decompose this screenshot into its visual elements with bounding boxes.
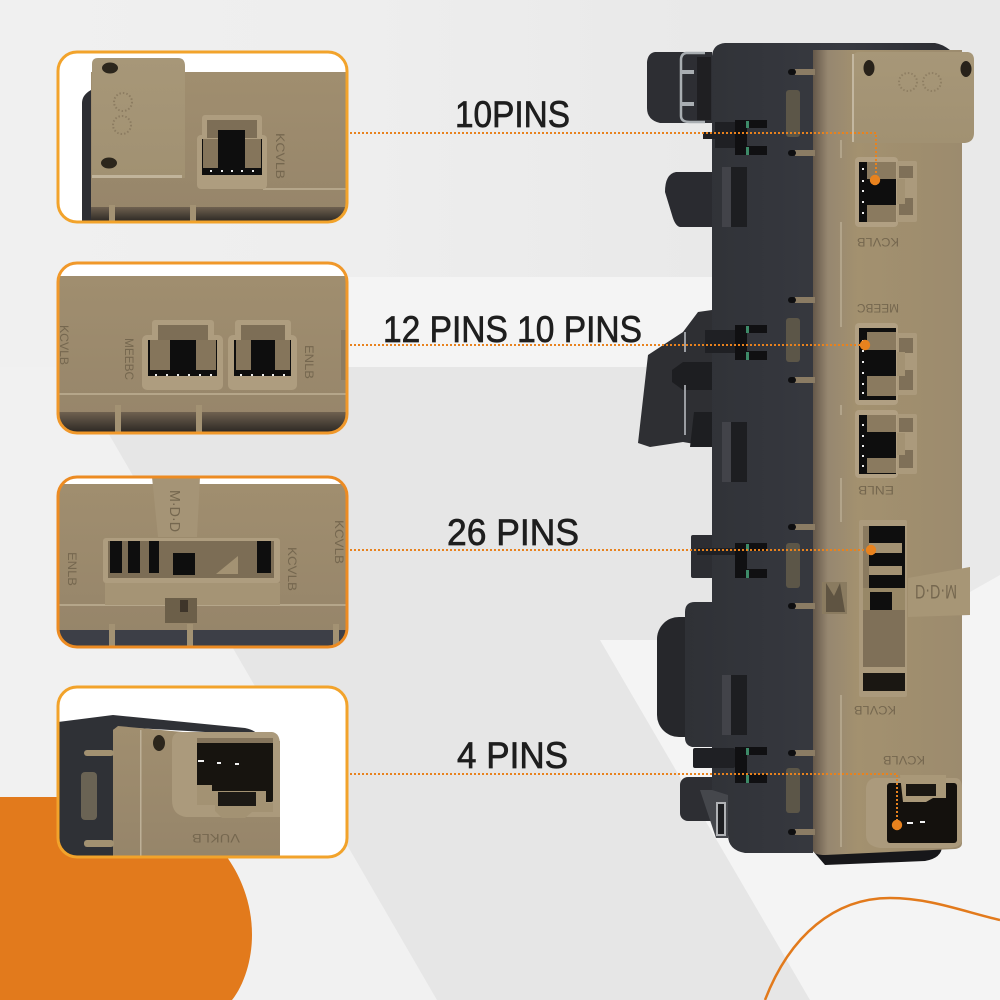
panel 2 frame (58, 263, 347, 433)
bottom clip (680, 777, 730, 838)
moulded blocks (722, 167, 747, 735)
raised light lines (840, 140, 842, 847)
tan body (84, 726, 280, 857)
black base under tan (813, 846, 942, 865)
lower bump (105, 583, 280, 605)
embossed label right: KCVLB (332, 520, 346, 564)
embossed label: 12 pins: MEEBC (857, 301, 899, 315)
panel 4 frame (58, 687, 347, 857)
tan body (58, 276, 347, 433)
26-pin slot (103, 538, 280, 583)
DDM tab with label (152, 477, 200, 537)
far-left label: KCVLB (57, 325, 71, 365)
label: 26 PINS: 26 PINS (447, 512, 579, 553)
latch inner (672, 362, 712, 447)
housing ridge (341, 330, 346, 380)
rounded windows (786, 90, 800, 813)
black housing edge (82, 90, 91, 222)
tan ribs through black (795, 69, 815, 835)
side protrusions (693, 122, 735, 768)
panel 3 frame (58, 477, 347, 647)
rocker knob (657, 617, 707, 737)
side tab lower (691, 535, 715, 578)
panel: 12 and 10 pins close-up (57, 263, 347, 433)
connector: 10 pins lower (855, 410, 917, 478)
black body (685, 43, 950, 853)
edge label: MEEBC (348, 133, 362, 179)
embossed label: lower 10 pins: ENLB (858, 483, 894, 497)
black housing (58, 715, 258, 857)
leader: 4 PINS (350, 774, 902, 830)
label: 10PINS: 10PINS (455, 94, 570, 135)
orange curved line bottom-right (765, 898, 1000, 1000)
leader: 12 PINS 10 PINS (350, 340, 870, 350)
side tab upper (665, 172, 712, 227)
leader: 10PINS (350, 133, 880, 185)
panel: 4 pins close-up (58, 687, 347, 857)
tan body (91, 72, 347, 222)
DDM tab with label: D·D·M (915, 580, 957, 601)
panel 1 frame (58, 52, 347, 222)
product: switch housing (638, 43, 974, 865)
connector: 12 pins (855, 323, 917, 405)
embossed label: VUKLB (192, 831, 240, 845)
connector: 10 pins (228, 320, 297, 390)
DDM tab with label: M·D·D (166, 490, 183, 532)
panel: 10 pins close-up (58, 52, 362, 222)
tan body (58, 484, 347, 647)
embossed label: 4 pins: KCVLB (883, 753, 925, 767)
connector: 10 pins upper (855, 157, 917, 227)
embossed label left: ENLB (65, 552, 79, 586)
orange blob bottom-left (0, 797, 252, 1000)
embossed label: upper 10 pins: KCVLB (857, 235, 899, 249)
latch highlight (684, 332, 686, 435)
notch (165, 598, 197, 623)
green-lit notches (735, 120, 767, 783)
embossed label: 26 pins: KCVLB (854, 703, 896, 717)
tan body (813, 50, 962, 855)
connector: 26 pins slot (859, 520, 907, 697)
mounting tab (92, 58, 185, 178)
panel: 26 pins close-up (58, 477, 347, 647)
left clip top (647, 52, 712, 123)
DDM tab with label (908, 567, 970, 617)
leader: 26 PINS (350, 545, 876, 555)
connector (197, 115, 267, 189)
connector: 4 pins (866, 775, 962, 848)
latch middle (638, 310, 712, 447)
embossed label centre: KCVLB (285, 547, 299, 591)
embossed label: KCVLB (273, 133, 287, 179)
embossed label right: ENLB (302, 345, 316, 379)
label: 4 PINS: 4 PINS (457, 735, 568, 776)
top mounting tab (852, 52, 974, 143)
side notch (822, 582, 847, 614)
label: 12 PINS 10 PINS: 12 PINS 10 PINS (383, 309, 642, 350)
connector (172, 732, 280, 818)
connector: 12 pins (142, 320, 223, 390)
embossed label left: MEEBC (122, 338, 136, 380)
